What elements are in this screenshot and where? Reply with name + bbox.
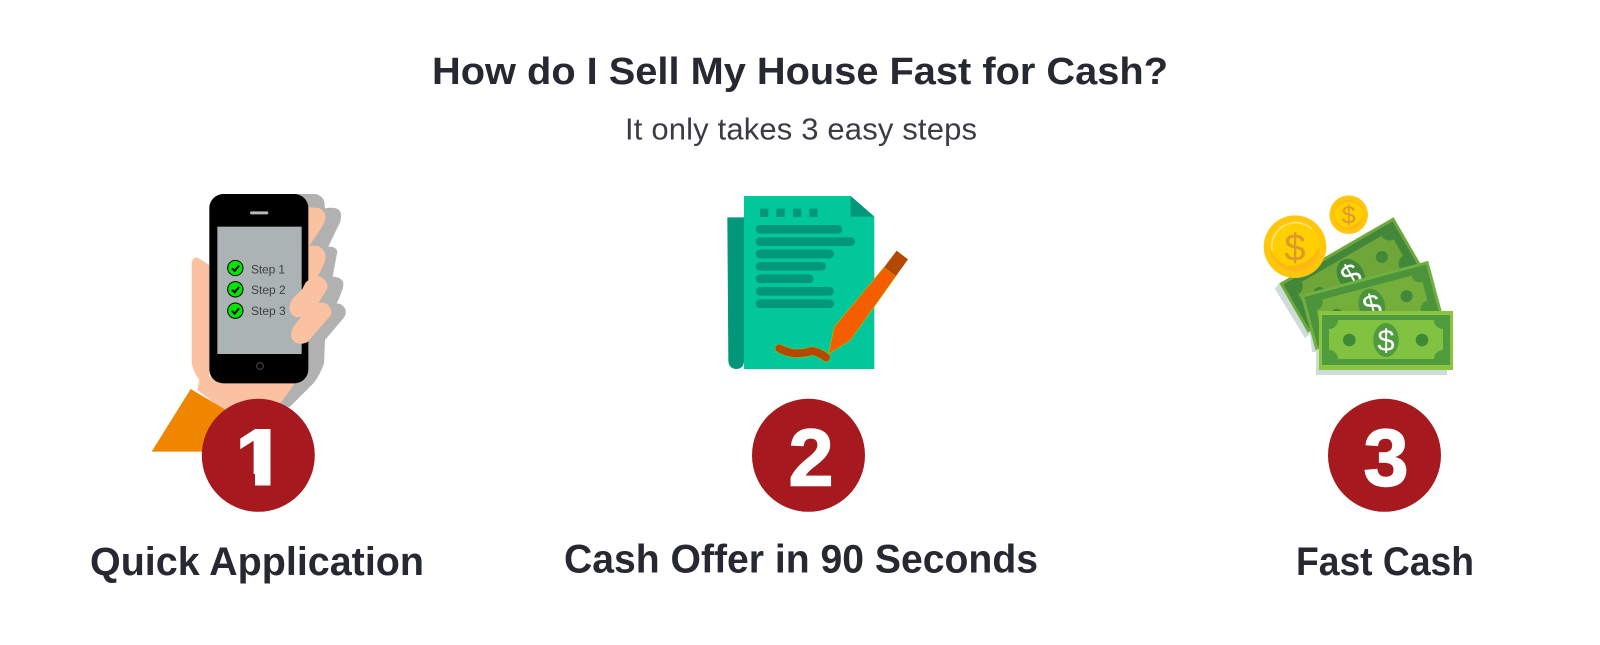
front bill <box>1319 311 1453 370</box>
title: How do I Sell My House Fast for Cash? <box>432 51 1168 93</box>
phone screen <box>217 227 302 354</box>
phone speaker <box>250 211 268 214</box>
checklist <box>228 260 286 318</box>
icon: cash and coins <box>1264 195 1453 375</box>
large coin: $ <box>1284 228 1306 270</box>
bill shadows <box>1275 283 1447 375</box>
document page <box>744 196 874 369</box>
back bill <box>1279 217 1422 333</box>
checklist: Step 3 <box>251 304 286 318</box>
palm and wrist <box>192 257 297 410</box>
phone body <box>209 194 308 383</box>
checklist: Step 1 <box>251 262 285 276</box>
icon: signed document <box>727 196 908 369</box>
subtitle: It only takes 3 easy steps <box>625 112 977 146</box>
step 2 label: Cash Offer in 90 Seconds <box>564 538 1038 582</box>
front bill: $ <box>1377 323 1395 358</box>
text lines <box>760 229 851 304</box>
back flap <box>727 217 744 369</box>
folded corner <box>851 196 874 217</box>
step 3 badge <box>1328 399 1441 512</box>
step 3 label: Fast Cash <box>1296 540 1474 584</box>
lower fingers <box>291 278 330 342</box>
pencil end <box>884 251 908 276</box>
back bill: $ <box>1334 255 1368 295</box>
signature <box>779 348 826 357</box>
small coin: $ <box>1342 202 1356 230</box>
step 2 badge: 2 <box>788 414 834 504</box>
hand shadow <box>273 194 346 410</box>
phone home button <box>257 363 263 369</box>
step 1 label: Quick Application <box>90 540 424 584</box>
middle bill: $ <box>1359 286 1385 326</box>
large coin <box>1264 215 1326 278</box>
step 2 badge <box>752 399 865 512</box>
small coin <box>1329 195 1368 234</box>
sleeve <box>152 389 225 452</box>
step 1 badge <box>202 399 315 512</box>
square marks <box>760 209 818 217</box>
middle bill <box>1301 261 1443 350</box>
icon: hand holding phone <box>152 194 346 452</box>
pencil <box>828 267 896 354</box>
step 1 badge: 1 <box>235 414 281 504</box>
step 3 badge: 3 <box>1363 414 1409 504</box>
upper fingers <box>305 208 324 283</box>
checklist: Step 2 <box>251 283 286 297</box>
